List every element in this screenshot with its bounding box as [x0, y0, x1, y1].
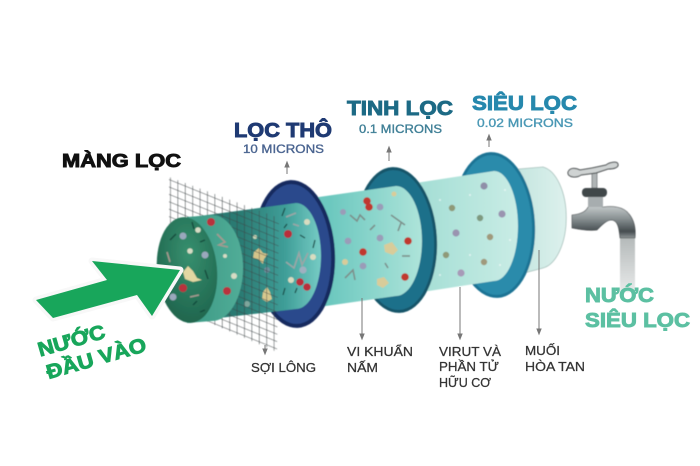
arrow up: fine — [387, 147, 391, 161]
label: bacteria and fungi: VI KHUẨN — [347, 344, 413, 359]
label: viruses and organic particles: VIRUT VÀ — [439, 344, 502, 359]
tube section with bacteria — [298, 186, 422, 310]
inlet arrow — [36, 261, 180, 318]
heading: ultra filter — [472, 91, 577, 130]
inlet water label — [35, 309, 149, 384]
label: bacteria and fungi: NẤM — [347, 360, 378, 375]
label: bacteria and fungi — [347, 344, 413, 375]
arrow down: bacteria — [360, 298, 364, 339]
inlet water label: ĐẦU VÀO — [44, 333, 149, 384]
label: fibres: SỢI LÔNG — [251, 360, 316, 375]
heading: ultra filter: 0.02 MICRONS — [477, 116, 573, 130]
outlet water label: NƯỚC — [585, 283, 654, 307]
label: viruses and organic particles: HỮU CƠ — [439, 375, 491, 390]
label: viruses and organic particles — [439, 344, 502, 390]
heading: coarse filter — [234, 118, 332, 156]
label: viruses and organic particles: PHẦN TỬ — [439, 359, 499, 374]
label: dissolved salts: MUỐI — [525, 343, 560, 358]
ring: ultra filtration — [449, 150, 539, 300]
heading: fine filter — [347, 98, 453, 136]
arrow down: virus — [458, 287, 462, 339]
arrow up: ultra — [487, 135, 491, 147]
arrow down: salts — [537, 250, 541, 334]
outlet water label — [585, 283, 690, 332]
faucet stream — [620, 238, 635, 292]
label: dissolved salts: HÒA TAN — [525, 359, 585, 374]
faucet handle — [568, 162, 618, 177]
arrows: up and down pointers — [263, 135, 541, 354]
membrane mesh — [169, 177, 279, 352]
ring: fine filtration — [351, 165, 441, 315]
faucet neck and collar — [582, 188, 607, 207]
tube section inside first ring — [185, 203, 321, 322]
heading: fine filter: 0.1 MICRONS — [359, 122, 442, 136]
heading: coarse filter: LỌC THÔ — [234, 118, 332, 142]
outlet tube section — [494, 167, 566, 281]
heading: ultra filter: SIÊU LỌC — [472, 91, 577, 115]
arrow down: fibres — [263, 345, 267, 354]
heading: coarse filter: 10 MICRONS — [243, 142, 324, 156]
filter illustration — [152, 150, 566, 352]
tube section with viruses — [396, 171, 518, 296]
title: membrane label: MÀNG LỌC — [62, 150, 181, 171]
outlet water label: SIÊU LỌC — [585, 308, 690, 332]
heading: fine filter: TINH LỌC — [347, 98, 453, 120]
arrow up: coarse — [285, 162, 289, 174]
faucet — [568, 162, 635, 292]
label: dissolved salts — [525, 343, 585, 374]
faucet stem — [592, 168, 597, 188]
inlet water label: NƯỚC — [35, 319, 108, 361]
entry drum — [152, 215, 243, 325]
faucet body — [572, 205, 635, 238]
ring: coarse filtration — [249, 178, 339, 330]
